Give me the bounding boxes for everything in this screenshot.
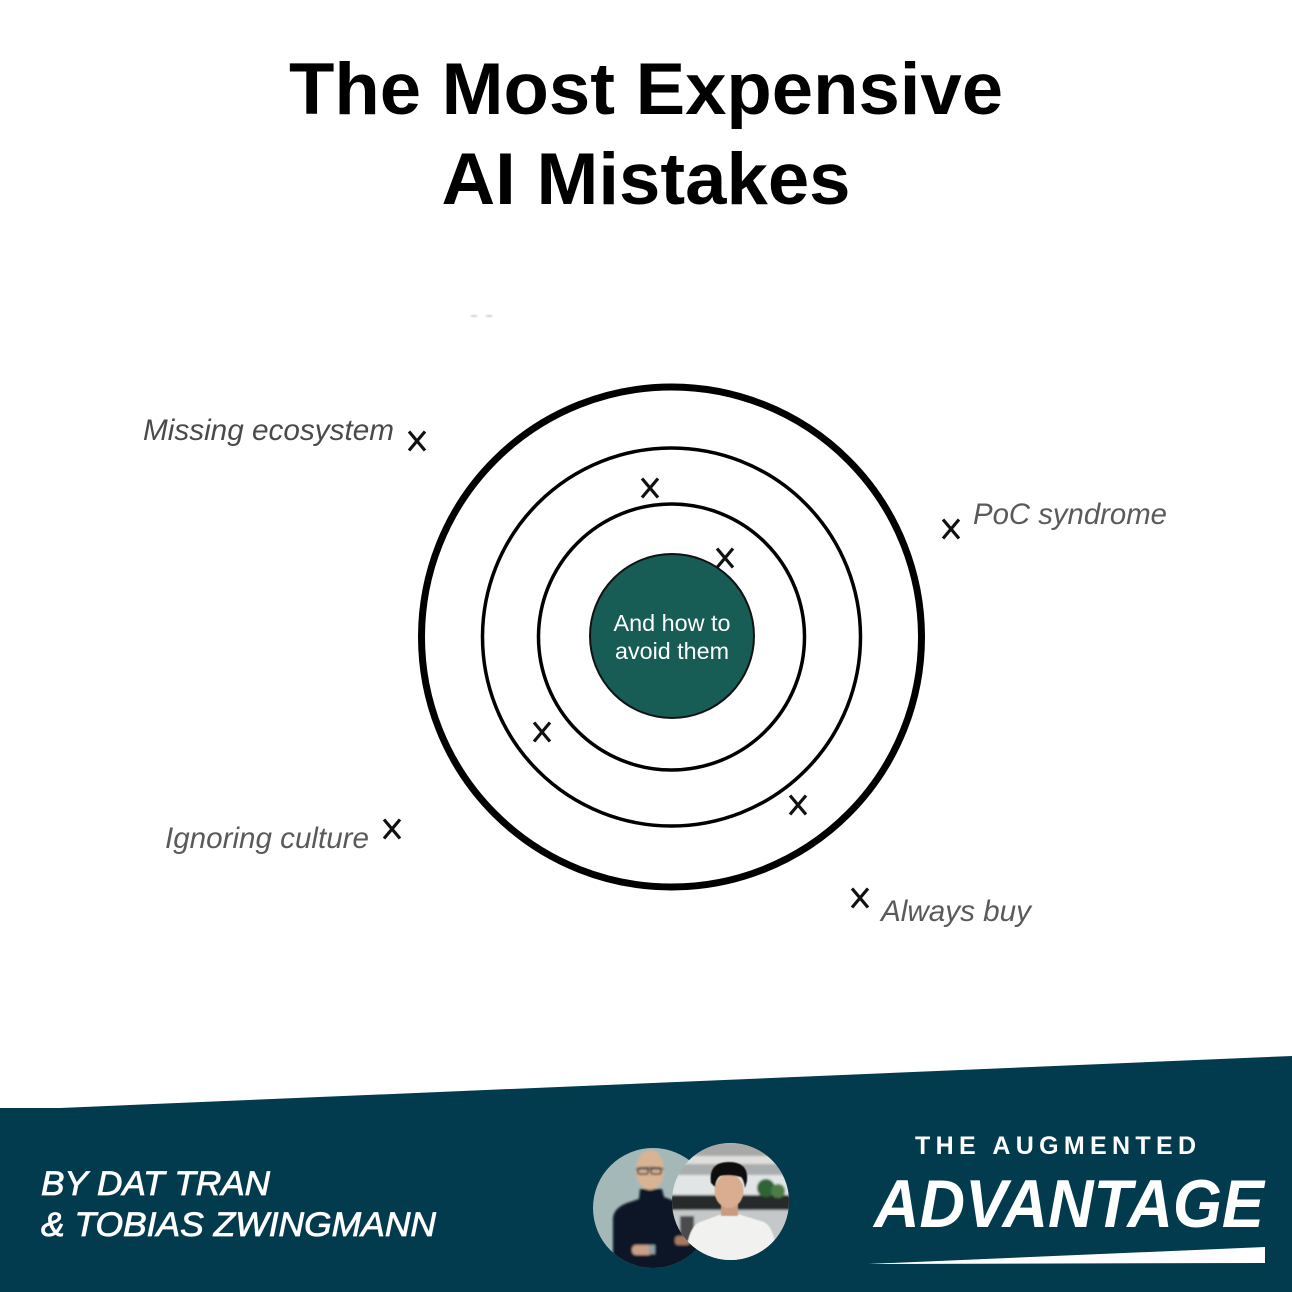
authors text: BY DAT TRAN	[41, 1165, 270, 1203]
centre circle: And how to	[614, 610, 730, 636]
inner ring	[538, 504, 804, 770]
label: Always buy: Always buy	[879, 895, 1033, 928]
authors text: & TOBIAS ZWINGMANN	[41, 1206, 436, 1244]
label: Ignoring culture: Ignoring culture	[165, 822, 369, 855]
title: The Most Expensive	[289, 49, 1003, 130]
logo: THE AUGMENTED: THE AUGMENTED	[915, 1132, 1196, 1160]
label: PoC syndrome: PoC syndrome	[973, 498, 1167, 531]
photo: right author	[670, 1141, 792, 1262]
centre circle: avoid them	[615, 638, 729, 664]
title: AI Mistakes	[442, 139, 850, 220]
faint marks	[471, 315, 492, 317]
logo: ADVANTAGE: ADVANTAGE	[872, 1166, 1266, 1242]
x markers	[384, 432, 959, 908]
outer ring	[422, 387, 922, 887]
target diagram	[422, 387, 922, 887]
title	[289, 49, 1003, 220]
photo: left author	[593, 1148, 696, 1268]
middle ring	[482, 448, 860, 826]
logo	[868, 1132, 1266, 1264]
centre circle	[590, 554, 754, 718]
logo: swoosh	[868, 1247, 1265, 1264]
label: Missing ecosystem: Missing ecosystem	[143, 414, 394, 447]
footer banner	[0, 1056, 1292, 1292]
authors text	[41, 1165, 436, 1244]
